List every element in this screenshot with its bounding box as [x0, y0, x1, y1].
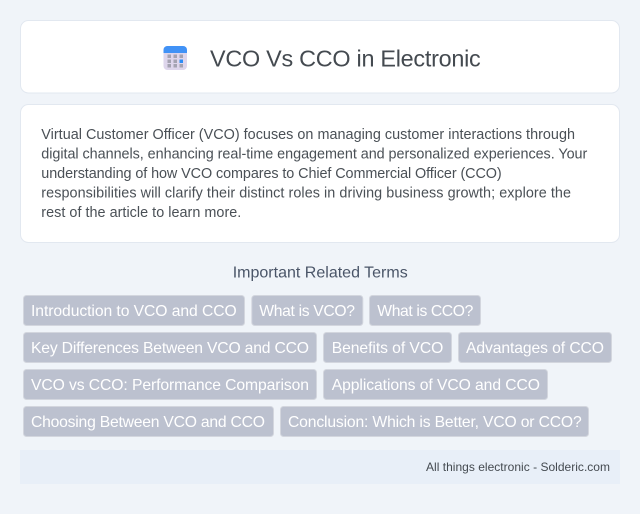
chip: what is CCO: [370, 296, 480, 326]
chip: benefits of VCO: Benefits of VCO: [332, 340, 443, 357]
footer bar: [20, 450, 620, 484]
text block: description: responsibilities will clarify their distinct roles in driving business growth; explore the: [41, 186, 571, 202]
chip: advantages of CCO: Advantages of CCO: [466, 340, 604, 357]
chip: introduction: Introduction to VCO and CCO: [31, 303, 237, 320]
chip: choosing between: Choosing Between VCO and CCO: [31, 414, 265, 431]
chip: conclusion: Conclusion: Which is Better, VCO or CCO?: [288, 414, 582, 431]
chip: conclusion: [280, 406, 588, 436]
icon: calendar: [164, 46, 187, 70]
chip: applications: [324, 370, 548, 400]
chip: choosing between: [24, 406, 274, 436]
text block: description: [41, 127, 588, 221]
text block: description: understanding of how VCO compares to Chief Commercial Officer (CCO): [41, 166, 502, 182]
chip: key differences: [24, 332, 316, 362]
chip: benefits of VCO: [324, 332, 452, 362]
panel: header card: [20, 20, 620, 93]
chip: key differences: Key Differences Between VCO and CCO: [31, 340, 309, 357]
text block: description: rest of the article to learn more.: [41, 205, 241, 221]
chip: what is VCO: [252, 296, 363, 326]
chip: advantages of CCO: [458, 332, 612, 362]
text block: description: Virtual Customer Officer (VCO) focuses on managing customer interactions through: [41, 127, 575, 143]
chip: what is CCO: What is CCO?: [377, 303, 474, 320]
heading: important related terms: Important Related Terms: [233, 265, 408, 282]
title: VCO Vs CCO in Electronic: [210, 46, 481, 72]
footer credit: All things electronic - Solderic.com: [426, 460, 610, 474]
chip: performance comparison: [24, 370, 316, 400]
panel: description card: [20, 104, 620, 242]
chip: performance comparison: VCO vs CCO: Performance Comparison: [31, 377, 309, 394]
chip: what is VCO: What is VCO?: [259, 303, 355, 320]
chip: applications: Applications of VCO and CCO: [332, 377, 540, 394]
panel: related term chips: [24, 296, 612, 436]
chip: introduction: [24, 296, 244, 326]
text block: description: digital channels, enhancing real-time engagement and personalized experiences. Your: [41, 146, 588, 162]
